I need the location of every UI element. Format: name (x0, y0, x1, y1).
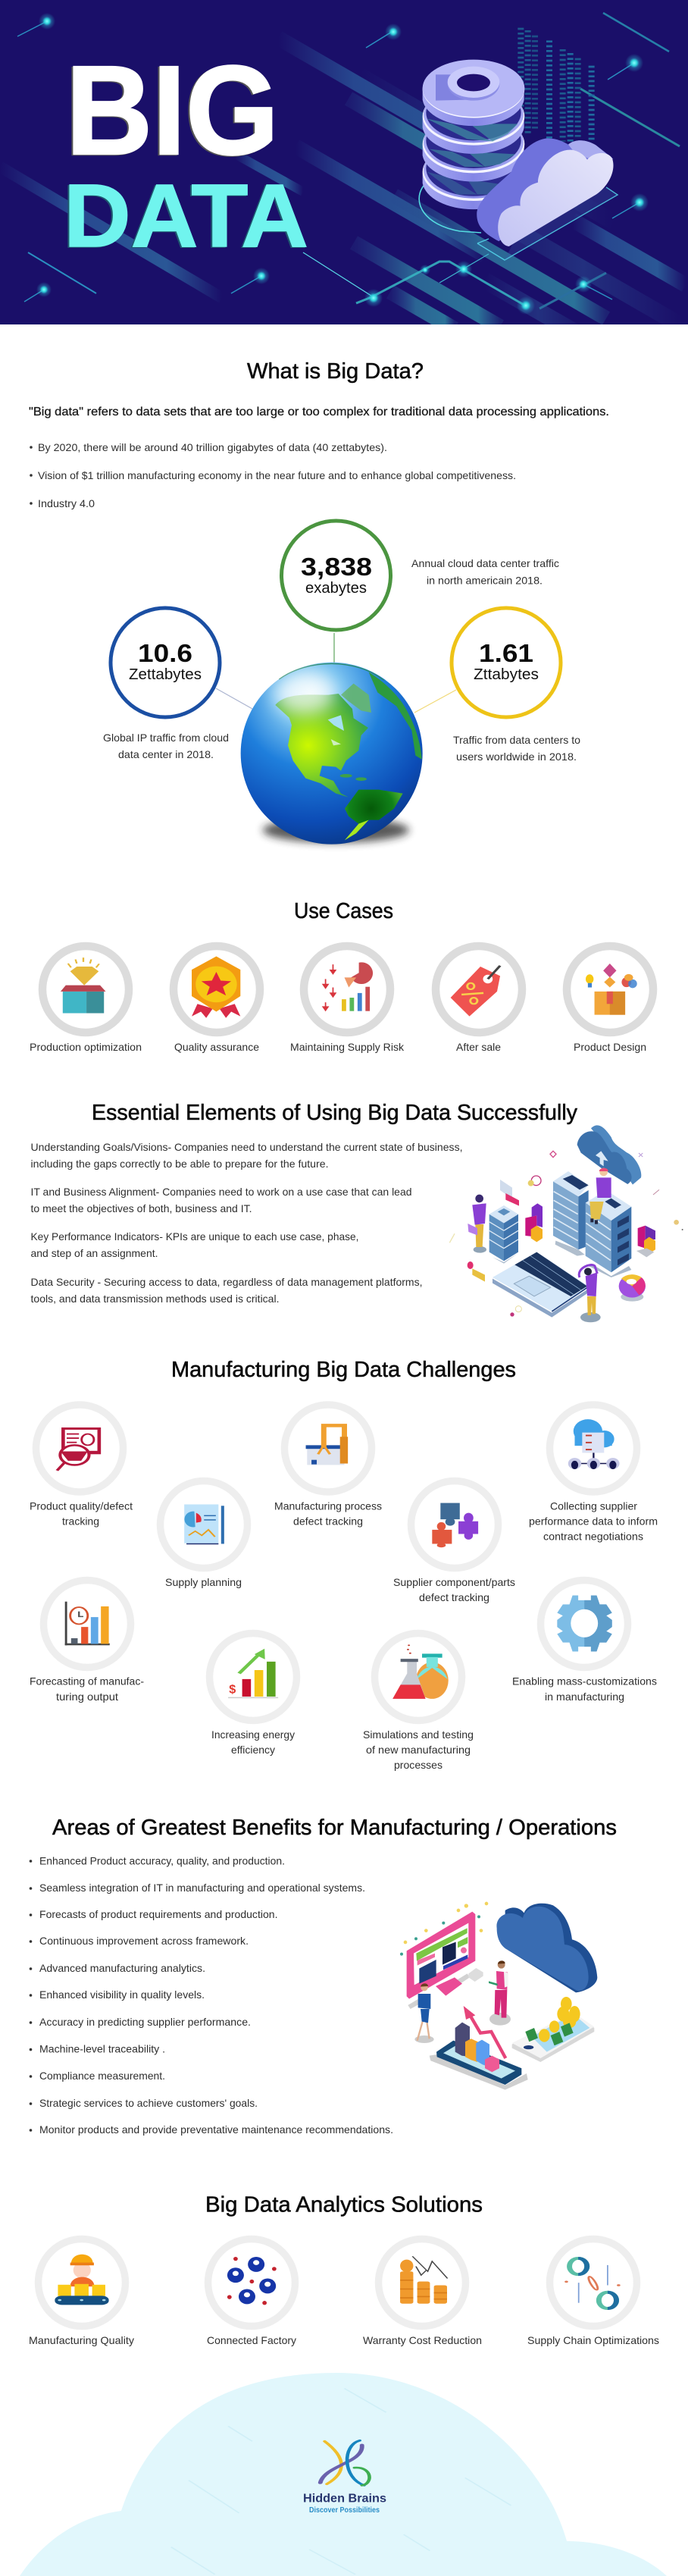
stat: 3,838 exabytes: exabytes (305, 580, 367, 597)
caption: annual cloud traffic (411, 557, 559, 587)
caption: annual cloud traffic: in north americain 2018. (427, 575, 543, 587)
challenge labels: defect tracking (293, 1515, 363, 1528)
big data headline (67, 64, 307, 248)
icon: data columns (521, 28, 592, 142)
challenge labels: Forecasting of manufac- (30, 1675, 144, 1688)
text: data security (30, 1276, 423, 1305)
panel: footer cloud with logo (20, 2373, 667, 2576)
challenge labels: tracking (62, 1515, 99, 1528)
challenge icons (57, 1419, 620, 1699)
solution labels: Manufacturing Quality (29, 2334, 134, 2346)
item: quality assurance: Quality assurance (174, 1041, 259, 1053)
item: after sale (436, 946, 522, 1053)
bullet list: By 2020, there will be around 40 trillion gigabytes of data (40 zettabytes). (38, 441, 387, 453)
caption: global IP traffic (103, 732, 229, 760)
rings (36, 1405, 636, 1721)
challenge labels: Supply planning (165, 1576, 242, 1588)
stat: 1.61 zettabytes: 1.61 (479, 639, 533, 667)
icon: connected factory (227, 2257, 277, 2305)
heading: greatest benefits: Areas of Greatest Benefits for Manufacturing / Operations (52, 1816, 617, 1840)
solution labels: Warranty Cost Reduction (363, 2334, 482, 2346)
challenge labels: Product quality/defect (30, 1500, 133, 1512)
text: business alignment: IT and Business Alignment- Companies need to work on a use case that can lead (30, 1186, 412, 1198)
benefits list (30, 1854, 393, 2136)
stat: 3,838 exabytes (282, 521, 391, 630)
icon: energy growth (228, 1649, 278, 1697)
stat: 1.61 zettabytes (452, 608, 561, 717)
item: production optimization: Production optimization (30, 1041, 142, 1053)
benefits list: Continuous improvement across framework. (39, 1935, 249, 1947)
big data headline: BIG (66, 40, 279, 181)
text: goals and visions: including the gaps correctly to be able to prepare for the future. (30, 1158, 329, 1170)
item: product design (567, 946, 653, 1053)
challenge labels (30, 1500, 658, 1771)
challenge labels: defect tracking (419, 1591, 489, 1603)
bullet list: Industry 4.0 (38, 497, 95, 509)
stat: 3,838 exabytes: 3,838 (301, 553, 372, 581)
icon: energy growth: $ (229, 1684, 236, 1696)
item: maintaining supply risk: Maintaining Supply Risk (290, 1041, 405, 1053)
challenge labels: Manufacturing process (274, 1500, 382, 1512)
text: data security: Data Security - Securing access to data, regardless of data management platforms, (30, 1276, 423, 1288)
benefits list: Accuracy in predicting supplier performance. (39, 2016, 251, 2028)
panel: hero banner (0, 0, 688, 341)
benefits list: Seamless integration of IT in manufacturing and operational systems. (39, 1882, 365, 1894)
benefits list: Forecasts of product requirements and production. (39, 1908, 277, 1920)
heading: what is big data: What is Big Data? (247, 359, 424, 384)
challenge labels: Increasing energy (211, 1728, 295, 1741)
solution labels: Supply Chain Optimizations (527, 2334, 659, 2346)
panel: essential elements (30, 1101, 683, 1322)
text: KPIs (30, 1230, 359, 1259)
item: quality assurance (174, 946, 260, 1053)
icon: robot arm machine (306, 1425, 348, 1465)
icon: supply chain optimizations (564, 2258, 621, 2308)
icon: warranty cost reduction (400, 2256, 448, 2304)
text: goals and visions (30, 1141, 462, 1170)
challenge labels: turing output (56, 1691, 118, 1703)
heading: use cases: Use Cases (294, 899, 393, 923)
icon: cloud (477, 139, 613, 246)
text: KPIs: and step of an assignment. (30, 1247, 158, 1259)
benefits list: Enhanced Product accuracy, quality, and production. (39, 1854, 285, 1866)
footer cloud shape (20, 2373, 667, 2576)
text: data security: tools, and data transmission methods used is critical. (30, 1293, 279, 1305)
solution icons (55, 2255, 621, 2308)
panel: use cases (30, 899, 653, 1053)
icon: flasks (392, 1644, 449, 1699)
icon: gear (557, 1595, 612, 1651)
challenge labels: performance data to inform (529, 1515, 658, 1528)
challenge labels: contract negotiations (543, 1531, 643, 1543)
icon: forecasting bars (65, 1602, 110, 1645)
stat: 10.6 zettabytes (111, 608, 220, 717)
heading: analytics solutions: Big Data Analytics Solutions (205, 2192, 483, 2217)
caption: traffic to users: users worldwide in 2018. (456, 751, 577, 763)
icon: supply planning chart (184, 1504, 224, 1543)
connector lines (216, 633, 456, 713)
logo wordmark: Hidden Brains (303, 2493, 386, 2505)
illustration: servers, cloud and laptop (449, 1125, 683, 1322)
item: maintaining supply risk (290, 946, 405, 1053)
text: business alignment: to meet the objectives of both, business and IT. (30, 1202, 252, 1214)
bullet list: Vision of $1 trillion manufacturing economy in the near future and to enhance global competitiveness. (38, 469, 516, 481)
benefits list: Machine-level traceability . (39, 2043, 165, 2055)
challenge labels: in manufacturing (545, 1691, 624, 1703)
challenge labels: Enabling mass-customizations (512, 1675, 657, 1688)
challenge labels: of new manufacturing (366, 1744, 471, 1756)
heading: manufacturing challenges: Manufacturing Big Data Challenges (171, 1358, 516, 1382)
icon: defect tracking (57, 1427, 101, 1471)
icon: manufacturing quality (55, 2255, 109, 2305)
stat: 1.61 zettabytes: Zttabytes (474, 666, 539, 683)
challenge labels: Supplier component/parts (393, 1576, 515, 1588)
challenge labels: Collecting supplier (550, 1500, 637, 1512)
item: production optimization (30, 946, 142, 1053)
hero circuit background (0, 13, 686, 341)
challenge labels: efficiency (231, 1744, 275, 1756)
panel: manufacturing challenges (30, 1358, 658, 1771)
stat: 10.6 zettabytes: Zettabytes (129, 666, 202, 683)
illustration: monitor, cloud, phone and tablet (400, 1902, 597, 2090)
panel: what is big data (29, 359, 609, 845)
logo wordmark (303, 2493, 386, 2515)
item: after sale: After sale (456, 1041, 501, 1053)
stat: 10.6 zettabytes: 10.6 (138, 639, 192, 667)
logo wordmark: Discover Possibilities (309, 2505, 380, 2515)
panel: greatest benefits (30, 1816, 617, 2136)
caption: annual cloud traffic: Annual cloud data center traffic (411, 557, 559, 569)
bullet list (30, 441, 516, 509)
heading: essential elements: Essential Elements of Using Big Data Successfully (92, 1101, 577, 1125)
icon: hidden brains logo (321, 2440, 370, 2485)
panel: analytics solutions (29, 2192, 659, 2346)
benefits list: Monitor products and provide preventative maintenance recommendations. (39, 2123, 393, 2136)
big data headline: DATA (64, 166, 308, 266)
icon: database cylinder (423, 60, 524, 209)
icon: cloud network (568, 1419, 620, 1469)
solution labels (29, 2334, 659, 2346)
item: product design: Product Design (574, 1041, 646, 1053)
icon: globe (241, 663, 423, 845)
benefits list: Enhanced visibility in quality levels. (39, 1988, 205, 2001)
text: goals and visions: Understanding Goals/Visions- Companies need to understand the current state of business, (30, 1141, 462, 1153)
benefits list: Strategic services to achieve customers' goals. (39, 2097, 258, 2109)
caption: global IP traffic: data center in 2018. (118, 748, 214, 760)
challenge labels: Simulations and testing (363, 1728, 474, 1741)
benefits list: Advanced manufacturing analytics. (39, 1962, 205, 1974)
text: KPIs: Key Performance Indicators- KPIs are unique to each use case, phase, (30, 1230, 359, 1243)
icon: puzzle pieces (432, 1503, 478, 1547)
rings (38, 2239, 636, 2326)
benefits list: Compliance measurement. (39, 2070, 165, 2082)
text: business alignment (30, 1186, 412, 1214)
solution labels: Connected Factory (207, 2334, 296, 2346)
challenge labels: processes (394, 1759, 443, 1771)
caption: global IP traffic: Global IP traffic from cloud (103, 732, 229, 744)
caption: traffic to users: Traffic from data centers to (453, 734, 580, 746)
caption: traffic to users (453, 734, 580, 763)
definition text: "Big data" refers to data sets that are too large or too complex for traditional data processing applications. (29, 406, 609, 418)
